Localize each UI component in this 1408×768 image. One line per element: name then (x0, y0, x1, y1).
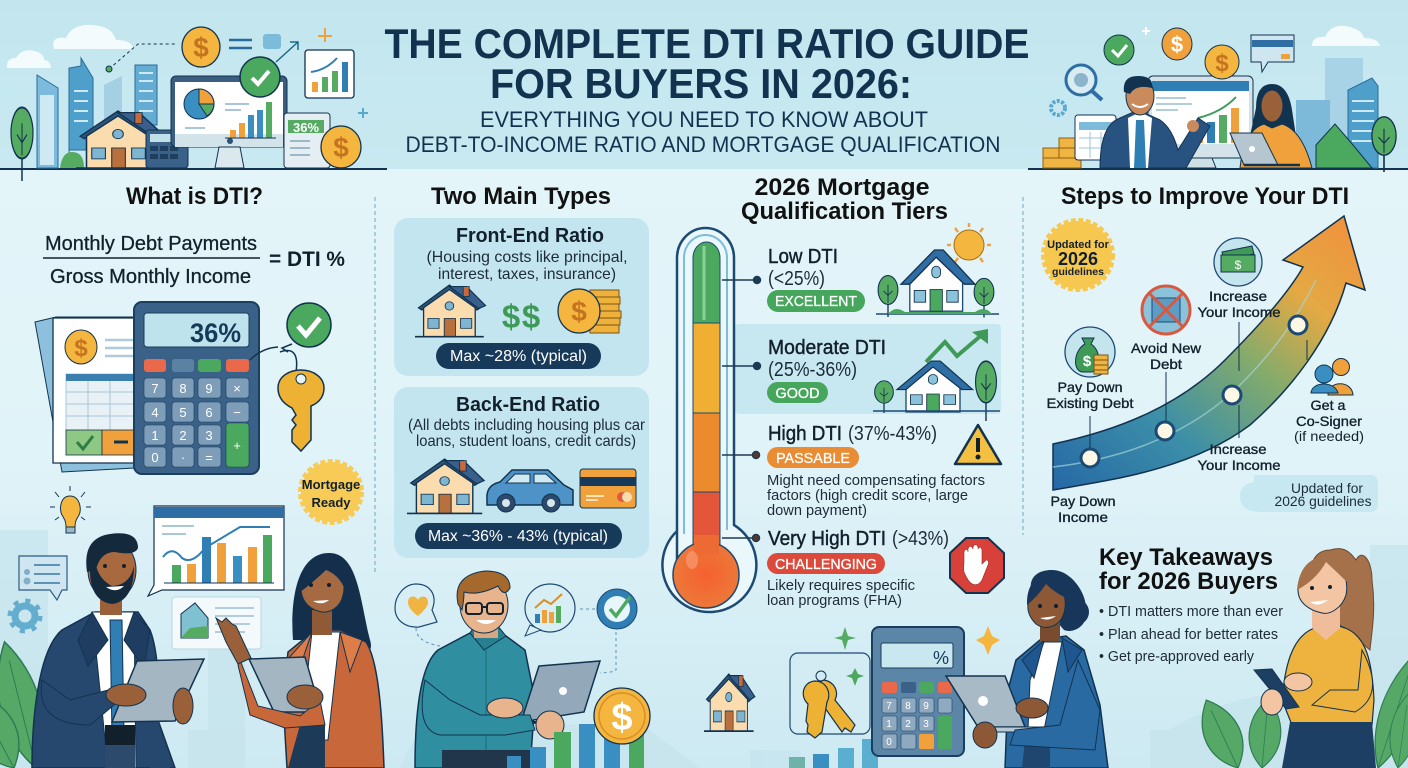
calculator: 6 (205, 405, 213, 420)
key takeaways list: • Plan ahead for better rates (1099, 626, 1278, 643)
step: increase income lower label: Increase (1210, 441, 1267, 457)
title: THE COMPLETE DTI RATIO GUIDE (384, 20, 1030, 67)
calculator: 3 (205, 428, 213, 443)
key takeaways list (1099, 603, 1283, 665)
tier: moderate DTI: Moderate DTI (768, 337, 886, 359)
step: co-signer label: Get a (1310, 397, 1346, 413)
header illustration right: $ (1171, 32, 1183, 57)
heading: Steps to Improve Your DTI (1061, 183, 1349, 210)
calculator: 1 (151, 428, 159, 443)
tier: low DTI: (<25%) (768, 268, 825, 290)
step: pay down income label: Income (1058, 509, 1108, 525)
step: increase income icon (1214, 238, 1262, 286)
tier: moderate DTI: (25%-36%) (768, 359, 857, 381)
calculator: 7 (886, 701, 892, 712)
section: What is DTI (0, 183, 384, 768)
step: increase income lower label (1198, 441, 1281, 473)
badge: Mortgage Ready: Ready (311, 495, 351, 510)
step: money bag icon (1065, 327, 1115, 377)
key takeaways list: • DTI matters more than ever (1099, 603, 1283, 620)
calculator: 3 (923, 719, 929, 730)
step: pay down existing debt label (1046, 379, 1134, 411)
icon: coin stack (558, 289, 621, 333)
thermometer (662, 228, 756, 612)
tier: very high DTI: Very High DTI (768, 528, 886, 550)
step: avoid debt label (1131, 340, 1202, 372)
check badge (240, 57, 280, 97)
step: pay down income label (1050, 493, 1116, 525)
icon: co-signer people (1311, 358, 1353, 395)
subtitle (406, 107, 1000, 157)
check badge (287, 303, 331, 347)
calculator: × (233, 381, 241, 396)
dashed route (109, 44, 175, 69)
calculator: 9 (923, 701, 929, 712)
step: co-signer label: Co-Signer (1296, 413, 1362, 429)
note: updated for guidelines: 2026 guidelines (1274, 493, 1372, 509)
step: money bag icon: $ (1083, 353, 1092, 370)
formula: = DTI % (269, 248, 345, 271)
coin top (182, 27, 220, 67)
panel: back-end ratio: loans, student loans, credit cards) (416, 433, 636, 450)
person: man with laptop (415, 571, 600, 768)
calculator (146, 130, 188, 168)
tier: high DTI: down payment) (767, 502, 867, 519)
woman (1240, 84, 1312, 168)
bubble: chart (525, 584, 575, 636)
buildings (1296, 58, 1378, 168)
tree (11, 107, 33, 181)
tier: high DTI: Might need compensating factors (767, 472, 985, 489)
tier: moderate DTI (767, 329, 1000, 421)
step: increase income icon: $ (1235, 258, 1242, 272)
step: pay down existing debt label: Existing Debt (1046, 395, 1134, 411)
divider lines (375, 197, 1023, 575)
step: pay down existing debt label: Pay Down (1058, 379, 1122, 395)
icon: small house (704, 674, 755, 731)
icon: dollar signs: $ (502, 298, 520, 335)
step: increase income label: Increase (1209, 288, 1267, 304)
calculator: 0 (886, 737, 892, 748)
section: steps to improve (1043, 183, 1408, 768)
step: increase income label: Your Income (1198, 304, 1281, 320)
key takeaways heading (1099, 544, 1278, 595)
coin top: $ (193, 32, 209, 63)
person: woman with phone (1254, 549, 1376, 768)
home card (172, 597, 261, 649)
calculator: + (233, 438, 241, 453)
calculator: 8 (179, 381, 187, 396)
laptop (1230, 133, 1300, 165)
icon: lightbulb (50, 486, 91, 533)
badge: updated for 2026: 2026 (1058, 249, 1098, 269)
icon: house (407, 459, 484, 513)
calculator: 2 (905, 719, 911, 730)
icon: gear (10, 601, 40, 631)
speech bubble (19, 556, 67, 600)
note: updated for guidelines: Updated for (1291, 480, 1363, 496)
monitor (171, 76, 287, 168)
tier: very high DTI: Likely requires specific (767, 577, 915, 594)
badge: Mortgage Ready: Mortgage (302, 477, 360, 492)
tier: low DTI: EXCELLENT (775, 293, 857, 310)
keys card (790, 653, 870, 738)
clouds (7, 25, 133, 68)
panel: front-end ratio: (Housing costs like principal, (426, 249, 628, 266)
header illustration right (1043, 26, 1396, 172)
icon: dollar signs: $ (522, 298, 540, 335)
header illustration left (7, 25, 368, 181)
person: woman with laptop (946, 570, 1108, 768)
badge: updated for 2026 (1043, 220, 1113, 290)
header illustration right: $ (1215, 50, 1229, 77)
coin (594, 688, 650, 744)
worksheet (35, 317, 134, 472)
section: Two Main Types (394, 183, 650, 768)
icon: house with growth arrow (873, 329, 1000, 421)
calculator: 9 (205, 381, 213, 396)
icon: warning triangle (955, 425, 1001, 464)
pill: max 28 (436, 343, 601, 369)
tier: very high DTI: (>43%) (892, 528, 949, 550)
heading: Two Main Types (431, 183, 611, 210)
monitor (1148, 76, 1253, 168)
coin bottom: $ (333, 132, 349, 163)
percent document: 36% (293, 120, 319, 135)
panel: back-end ratio: (All debts including housing plus car (408, 417, 646, 434)
badge: Mortgage Ready (300, 461, 362, 523)
bars (507, 724, 644, 768)
tier: low DTI: Low DTI (768, 246, 838, 268)
calculator: % (933, 648, 949, 668)
coin bottom (321, 126, 361, 168)
step: increase income lower label: Your Income (1198, 457, 1281, 473)
tier: high DTI: factors (high credit score, large (767, 487, 968, 504)
header band (0, 0, 1408, 169)
note: updated for guidelines (1240, 475, 1378, 512)
person: woman with clipboard (216, 553, 384, 768)
step: co-signer label: (if needed) (1294, 428, 1364, 444)
tier: very high DTI (767, 528, 1004, 609)
title: FOR BUYERS IN 2026: (490, 60, 912, 107)
tier: high DTI: High DTI (768, 423, 842, 445)
bubble: piggy (395, 584, 437, 627)
plants right (1190, 649, 1408, 768)
calculator (872, 627, 964, 756)
icon: coin stack: $ (571, 296, 587, 327)
icon: dollar signs (502, 298, 540, 335)
formula (43, 233, 345, 288)
calculator: 4 (151, 405, 159, 420)
connectors (722, 276, 760, 542)
panel: back-end ratio: Back-End Ratio (456, 394, 600, 416)
panel: front-end ratio: Front-End Ratio (456, 225, 604, 247)
heading: 2026 Mortgage (754, 174, 930, 201)
tier: moderate DTI: GOOD (776, 385, 820, 402)
key takeaways heading: Key Takeaways (1099, 544, 1273, 571)
key takeaways heading: for 2026 Buyers (1099, 568, 1278, 595)
chart bubble (305, 50, 354, 98)
calculator: 36% (190, 318, 241, 348)
section: qualification tiers (662, 174, 1108, 768)
tier: high DTI: (37%-43%) (848, 423, 937, 445)
step: avoid debt icon (1142, 286, 1190, 334)
tier: very high DTI: CHALLENGING (775, 556, 877, 573)
key (250, 344, 324, 451)
pill: max 28: Max ~28% (typical) (450, 348, 587, 365)
house (76, 111, 162, 168)
pill: max 36-43: Max ~36% - 43% (typical) (428, 528, 608, 545)
badge: updated for 2026: Updated for (1047, 239, 1110, 251)
step: co-signer label (1294, 397, 1364, 444)
heading: What is DTI? (126, 183, 263, 210)
tier: high DTI: PASSABLE (776, 450, 850, 467)
calculator: 1 (886, 719, 892, 730)
coin stack (1043, 138, 1081, 168)
step: pay down income label: Pay Down (1050, 493, 1116, 509)
growth arrow (1053, 216, 1365, 490)
subtitle: DEBT-TO-INCOME RATIO AND MORTGAGE QUALIFICATION (406, 132, 1000, 157)
man (1100, 76, 1210, 168)
percent document (284, 113, 330, 168)
calculator: 8 (905, 701, 911, 712)
calculator: · (181, 450, 185, 465)
subtitle: EVERYTHING YOU NEED TO KNOW ABOUT (480, 107, 928, 132)
icon: check target (597, 589, 637, 629)
step: avoid debt label: Avoid New (1131, 340, 1202, 356)
badge: updated for 2026: guidelines (1052, 266, 1104, 278)
calculator: 0 (151, 450, 159, 465)
bars (789, 739, 878, 768)
calculator: = (205, 450, 213, 465)
calculator: − (233, 405, 241, 420)
icon: stop hand (950, 538, 1004, 593)
icon: credit card (580, 469, 636, 508)
panel: front-end ratio: interest, taxes, insurance) (438, 266, 616, 283)
icon: house with sun (876, 223, 999, 318)
document (1075, 115, 1116, 160)
pill: max 36-43 (415, 523, 622, 549)
key takeaways list: • Get pre-approved early (1099, 648, 1254, 665)
calculator: 2 (179, 428, 187, 443)
heading: Qualification Tiers (741, 198, 948, 225)
sparkles (834, 626, 1000, 655)
calculator (134, 302, 259, 474)
background: pale skyline (0, 530, 1408, 768)
tier: low DTI (767, 223, 999, 318)
icons floating (1104, 35, 1134, 65)
tier: high DTI (767, 423, 1001, 519)
person: man with tablet (32, 533, 204, 768)
worksheet: $ (74, 335, 88, 362)
calculator: 7 (151, 381, 159, 396)
heading (741, 174, 948, 225)
chart window (148, 506, 284, 596)
title (384, 20, 1030, 157)
coin: $ (611, 697, 633, 739)
panel: back-end ratio (394, 387, 649, 558)
cloud (1312, 26, 1380, 46)
green bag (1316, 124, 1372, 168)
formula: Monthly Debt Payments (45, 233, 257, 255)
calculator: 5 (179, 405, 187, 420)
tier: very high DTI: loan programs (FHA) (767, 592, 902, 609)
formula: Gross Monthly Income (50, 266, 251, 288)
icon: house (415, 285, 486, 337)
plant left (0, 637, 72, 768)
step: avoid debt label: Debt (1150, 356, 1182, 372)
step: increase income label (1198, 288, 1281, 320)
icon: car (487, 470, 573, 512)
panel: front-end ratio (394, 218, 649, 376)
moderate tier background (735, 324, 1001, 414)
skyline (37, 58, 157, 168)
